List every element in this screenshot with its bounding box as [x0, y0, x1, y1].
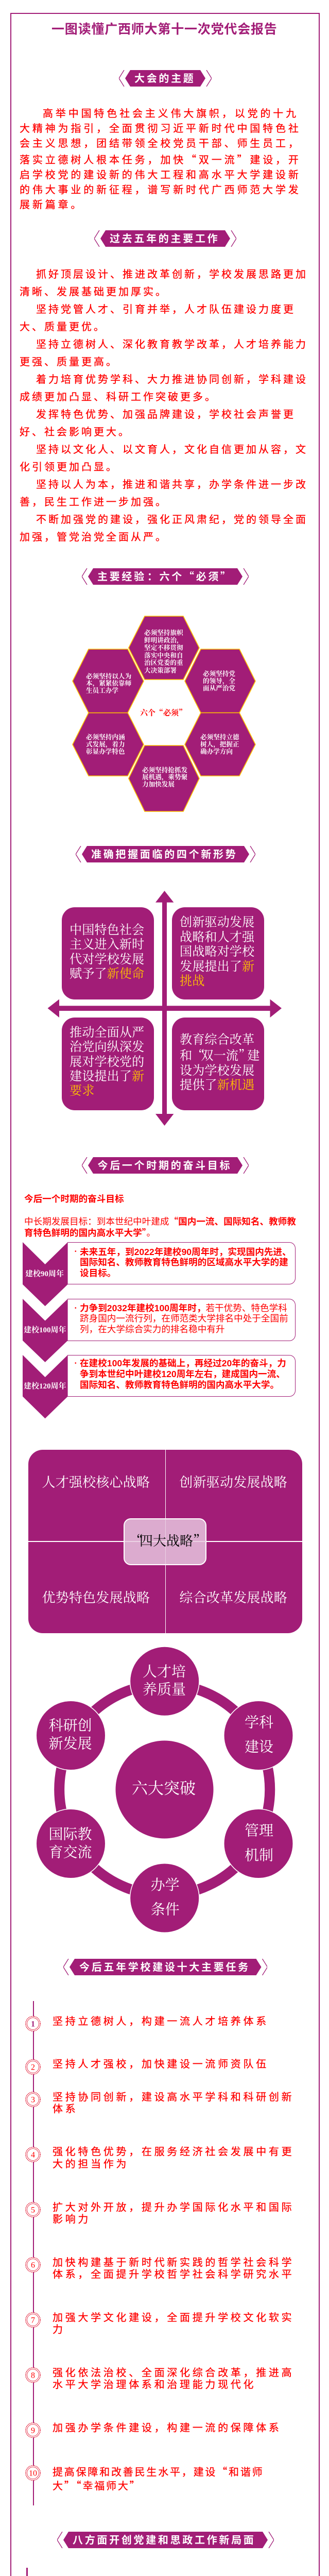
strategy: distinctive: 优势特色发展战略: [42, 1590, 150, 1605]
hexagon: top: 坚定不移贯彻: [144, 644, 183, 652]
task 2: 坚持人才强校，加快建设一流师资队伍: [53, 2059, 269, 2070]
hexagon: top: 鲜明讲政治，: [144, 636, 183, 645]
badge 3: [25, 2092, 41, 2107]
text block: past work 3: 更强、质量更高。: [20, 357, 118, 368]
heading: main experience: 主要经验：六个“必须”: [97, 568, 233, 583]
badge 5: [25, 2202, 41, 2217]
subheading: goals: 今后一个时期的奋斗目标: [24, 1194, 124, 1204]
text block: theme paragraph: 的伟大事业的新征程，谱写新时代广西师范大学发: [20, 184, 301, 196]
hexagon: upper right: 面从严治党: [203, 684, 235, 692]
text block: past work 6: 化引领更加凸显。: [20, 462, 118, 473]
text block: past work 8: 加强，管党治党全面从严。: [20, 532, 168, 543]
hexagon: lower left: 式发展，着力: [86, 740, 125, 749]
text block: past work 2: 坚持党管人才、引育并举，人才队伍建设力度更: [36, 304, 296, 315]
panel text: new requirement: [70, 1026, 144, 1098]
badge 1: [25, 2016, 41, 2031]
strategy: innovation: 创新驱动发展战略: [179, 1475, 287, 1490]
centre circle: 六大突破: [132, 1780, 196, 1798]
hexagon: top: 治区党委的重: [144, 659, 183, 667]
hexagon: top: [129, 616, 199, 680]
panel: new challenge: [172, 907, 264, 999]
panel text: new challenge: 创新驱动发展: [180, 916, 254, 929]
hexagon: upper left: 本，紧紧依靠师: [86, 680, 132, 688]
panel text: new mission: 赋予了新使命: [70, 967, 144, 981]
heading: eight aspects: 八方面开创党建和思政工作新局面: [73, 2534, 255, 2546]
hexagon diagram: six musts: [72, 616, 256, 812]
task 7: 加强大学文化建设，全面提升学校文化软实: [53, 2312, 294, 2324]
circle: discipline building: 建设: [245, 1739, 273, 1755]
goal: 120th anniversary: •: [75, 1361, 77, 1366]
circle: discipline building: 学科: [245, 1714, 273, 1731]
task 7: 力: [53, 2324, 65, 2335]
hexagon: lower left: [73, 713, 144, 776]
panel: four strategies: [28, 1450, 302, 1633]
circle: talent cultivation: 人才培: [143, 1664, 186, 1680]
task 5: 影响力: [53, 2214, 91, 2225]
panel text: new opportunity: 设为学校发展: [180, 1064, 254, 1078]
text block: past work 6: [20, 444, 308, 473]
goal: 120th anniversary: [23, 1355, 296, 1419]
task 8: [53, 2367, 294, 2392]
hexagon: top: 落实中央和自: [144, 652, 183, 659]
panel text: new challenge: [180, 916, 254, 988]
text block: theme paragraph: 大精神为指引，全面贯彻习近平新时代中国特色社: [20, 123, 301, 134]
badge 8: [25, 2367, 41, 2383]
heading: future goals: 今后一个时期的奋斗目标: [98, 1159, 232, 1172]
panel text: new mission: 代对学校发展: [70, 953, 144, 967]
circle: management mechanism: [224, 1809, 292, 1878]
timeline line: ten tasks: [33, 2001, 34, 2505]
panel: new opportunity: [172, 1018, 264, 1110]
task 3: [53, 2092, 294, 2115]
text block: past work 2: 大、质量更优。: [20, 321, 106, 333]
text block: past work 1: 清晰、发展基础更加厚实。: [20, 286, 168, 298]
heading: eight aspects: [57, 2532, 274, 2548]
task 10: 提高保障和改善民生水平，建设“和谐师: [53, 2464, 264, 2479]
badge 10: [25, 2465, 41, 2481]
circle: management mechanism: 管理: [245, 1822, 273, 1839]
hexagon: bottom: 展机遇，乘势聚: [142, 773, 188, 782]
circle: management mechanism: 机制: [245, 1847, 273, 1863]
heading: theme: 大会的主题: [134, 73, 196, 84]
goal: 100th anniversary: 跻身国内一流行列，在师范类大学排名中处于全国前: [80, 1313, 288, 1324]
panel text: new mission: 主义进入新时: [70, 938, 144, 952]
text block: theme paragraph: 高举中国特色社会主义伟大旗帜，以党的十九: [43, 108, 299, 120]
text block: past work 8: [20, 514, 308, 543]
text block: past work 8: 不断加强党的建设，强化正风肃纪，党的领导全面: [36, 514, 308, 526]
circle: school conditions: 条件: [151, 1901, 180, 1918]
hexagon: upper left: [73, 649, 144, 713]
hexagon: bottom: [129, 745, 199, 811]
text block: past work 7: 善，民生工作进一步加强。: [20, 497, 168, 508]
goal: 90th anniversary: [23, 1242, 296, 1307]
text block: theme paragraph: 落实立德树人根本任务，加快“双一流”建设，开: [20, 151, 301, 166]
panel text: new opportunity: 提供了新机遇: [180, 1078, 254, 1092]
badge 2: 2: [31, 2063, 35, 2072]
task 8: 强化依法治校、全面深化综合改革，推进高: [53, 2367, 294, 2379]
circle: school conditions: 办学: [151, 1877, 180, 1893]
panel text: new opportunity: 教育综合改革: [180, 1033, 254, 1047]
text block: past work 7: [20, 479, 308, 508]
circle: international exchange: [37, 1809, 105, 1878]
badge 4: 4: [31, 2150, 35, 2160]
heading: four new situations: 准确把握面临的四个新形势: [91, 849, 237, 860]
hexagon: upper left: 必须坚持以人为: [86, 672, 132, 680]
circle: discipline building: [224, 1701, 292, 1770]
goal: 100th anniversary: 力争到2032年建校100周年时，若干优势、特色学科: [80, 1302, 287, 1313]
task 5: 扩大对外开放，提升办学国际化水平和国际: [53, 2202, 294, 2213]
text block: past work 4: 成绩更加凸显、科研工作突破更多。: [20, 392, 217, 403]
task 10: 大”“幸福师大”: [53, 2478, 141, 2493]
task 10: [53, 2465, 264, 2493]
goal: 90th anniversary: 国际知名、教师教育特色鲜明的区域高水平大学的建: [80, 1257, 288, 1267]
circle: international exchange: 育交流: [48, 1844, 92, 1860]
centre box: four strategies: [124, 1518, 206, 1565]
hexagon: upper right: 必须坚持党: [203, 670, 235, 677]
goal: 90th anniversary: 设目标。: [80, 1268, 116, 1278]
heading: past five years: 过去五年的主要工作: [110, 233, 219, 245]
circle: talent cultivation: [130, 1647, 199, 1716]
text block: long term goal: [24, 1215, 296, 1239]
badge 9: [25, 2422, 41, 2438]
task 1: 坚持立德树人，构建一流人才培养体系: [53, 2016, 269, 2027]
badge 6: [25, 2257, 41, 2273]
text block: theme paragraph: [20, 108, 301, 211]
arrows: quadrant cross: [47, 891, 282, 1126]
panel text: new requirement: 建设提出了新: [70, 1070, 144, 1083]
badge 2: [25, 2059, 41, 2075]
hexagon: lower right: [185, 713, 255, 776]
goal: 90th anniversary: •: [75, 1249, 77, 1255]
circle: research innovation: 新发展: [48, 1735, 92, 1752]
heading: four new situations: [76, 846, 255, 862]
text block: past work 1: 抓好顶层设计、推进改革创新，学校发展思路更加: [36, 269, 308, 280]
heading: past five years: [94, 230, 236, 247]
panel text: new requirement: 治党向纵深发: [70, 1040, 144, 1054]
text block: theme paragraph: 启学校党的建设新的伟大工程和高水平大学建设新: [20, 170, 301, 181]
hexagon: top: 必须坚持旗帜: [144, 629, 184, 637]
badge 5: 5: [31, 2206, 35, 2214]
text block: past work 5: [20, 409, 296, 438]
panel text: new requirement: 推动全面从严: [70, 1026, 144, 1040]
circle: school conditions: [130, 1864, 199, 1932]
panel text: new requirement: 要求: [70, 1084, 94, 1098]
badge 9: 9: [31, 2427, 35, 2435]
strategy: talent: 人才强校核心战略: [42, 1475, 150, 1490]
hexagon: lower left: 必须坚持内涵: [86, 733, 125, 741]
goal: 120th anniversary: 在建校100年发展的基础上，再经过20年的奋斗，力: [80, 1358, 286, 1368]
circle: talent cultivation: 养质量: [143, 1681, 186, 1698]
hexagon: lower left: 彰显办学特色: [86, 748, 125, 755]
text block: past work 3: [20, 339, 308, 368]
text block: past work 4: [20, 374, 308, 403]
heading: ten main tasks: 今后五年学校建设十大主要任务: [79, 1961, 250, 1973]
circle: research innovation: [37, 1701, 105, 1770]
badge 10: 10: [29, 2469, 37, 2478]
goal: 100th anniversary: 建校100周年: [24, 1326, 66, 1334]
heading: ten main tasks: [63, 1959, 267, 1975]
text block: past work 3: 坚持立德树人、深化教育教学改革，人才培养能力: [36, 339, 308, 350]
strategy: reform: 综合改革发展战略: [179, 1590, 287, 1605]
timeline line: eight aspects: [26, 2568, 28, 2576]
badge 8: 8: [31, 2371, 35, 2380]
hexagon: upper left: 生员工办学: [86, 687, 118, 695]
badge 3: 3: [31, 2096, 35, 2104]
panel text: new requirement: 展对学校党的: [70, 1055, 144, 1069]
badge 7: 7: [31, 2316, 35, 2325]
goal: 120th anniversary: 建校120周年: [24, 1382, 66, 1391]
circle: international exchange: 国际教: [48, 1826, 92, 1842]
panel text: new challenge: 战略和人才强: [180, 930, 254, 944]
hexagon: upper right: [185, 649, 255, 713]
goal: 100th anniversary: •: [75, 1306, 77, 1311]
goal: 90th anniversary: 未来五年，到2022年建校90周年时，实现国内先进、: [80, 1247, 291, 1257]
goal: 120th anniversary: 争到本世纪中叶建校120周年左右，建成国内一流、: [80, 1369, 285, 1379]
text block: past work 7: 坚持以人为本，推进和谐共享，办学条件进一步改: [36, 479, 308, 490]
task 4: 大的担当作为: [53, 2159, 129, 2170]
text block: long term goal: 育特色鲜明的国内高水平大学”。: [24, 1226, 155, 1239]
task 3: 坚持协同创新，建设高水平学科和科研创新: [53, 2092, 294, 2103]
hexagon: bottom: 必须坚持抢抓发: [142, 766, 188, 774]
centre circle: [115, 1740, 213, 1838]
title: 一图读懂广西师大第十一次党代会报告: [51, 22, 278, 37]
panel: new mission: [62, 907, 154, 999]
goal: 90th anniversary: 建校90周年: [25, 1270, 64, 1278]
text block: past work 1: [20, 269, 308, 298]
text block: theme paragraph: 会主义思想，团结带领全校党员干部、师生员工，: [20, 138, 301, 149]
task 8: 水平大学治理体系和治理能力现代化: [53, 2379, 256, 2391]
hexagon: top: 大决策部署: [144, 666, 177, 674]
panel text: new challenge: 发展提出了新: [180, 960, 254, 974]
text block: long term goal: 中长期发展目标：到本世纪中叶建成“国内一流、国际知名、教师教: [24, 1215, 296, 1228]
circle: research innovation: 科研创: [48, 1717, 92, 1734]
task 4: 强化特色优势，在服务经济社会发展中有更: [53, 2146, 294, 2158]
text block: past work 2: [20, 304, 296, 333]
goal: 100th anniversary: 列，在大学综合实力的排名稳中有升: [80, 1324, 225, 1334]
hexagon: lower right: 树人，把握正: [200, 740, 239, 749]
goal: 100th anniversary: [23, 1299, 296, 1362]
goal: 120th anniversary: 国际知名、教师教育特色鲜明的国内高水平大学。: [80, 1380, 279, 1390]
task 6: [53, 2257, 294, 2280]
text block: past work 4: 着力培育优势学科、大力推进协同创新，学科建设: [36, 374, 308, 385]
panel text: new opportunity: 和“双一流”建: [180, 1045, 259, 1063]
text block: past work 5: 发挥特色优势、加强品牌建设，学校社会声誉更: [36, 409, 296, 420]
task 7: [53, 2312, 294, 2335]
text block: past work 6: 坚持以文化人、以文育人，文化自信更加从容，文: [36, 444, 308, 455]
task 6: 加快构建基于新时代新实践的哲学社会科学: [53, 2257, 294, 2268]
diagram: six breakthroughs: [37, 1647, 292, 1932]
hexagon: upper right: 的领导，全: [203, 677, 235, 685]
task 9: 加强办学条件建设，构建一流的保障体系: [53, 2422, 282, 2434]
badge 6: 6: [31, 2261, 35, 2270]
centre label: “四大战略”: [130, 1531, 206, 1550]
badge 4: [25, 2147, 41, 2162]
heading: future goals: [82, 1157, 249, 1174]
hexagon: lower right: 确办学方向: [200, 748, 233, 755]
hexagon centre label: 六个“必须”: [140, 707, 186, 718]
task 3: 体系: [53, 2104, 78, 2115]
panel text: new challenge: 挑战: [180, 974, 204, 988]
panel text: new challenge: 国战略对学校: [180, 945, 254, 959]
task 6: 体系，全面提升学校哲学社会科学研究水平: [53, 2269, 294, 2280]
badge 1: 1: [31, 2020, 35, 2029]
text block: theme paragraph: 展新篇章。: [20, 199, 83, 211]
hexagon: lower right: 必须坚持立德: [200, 733, 240, 741]
text block: past work 5: 好、社会影响更大。: [20, 427, 131, 438]
hexagon: bottom: 力加快发展: [142, 781, 175, 788]
panel text: new opportunity: [180, 1033, 259, 1092]
panel text: new mission: [70, 923, 144, 981]
panel: new requirement: [62, 1018, 154, 1110]
panel text: new mission: 中国特色社会: [70, 923, 144, 937]
task 5: [53, 2202, 294, 2225]
task 4: [53, 2146, 294, 2170]
heading: theme: [119, 70, 212, 87]
badge 7: [25, 2312, 41, 2328]
